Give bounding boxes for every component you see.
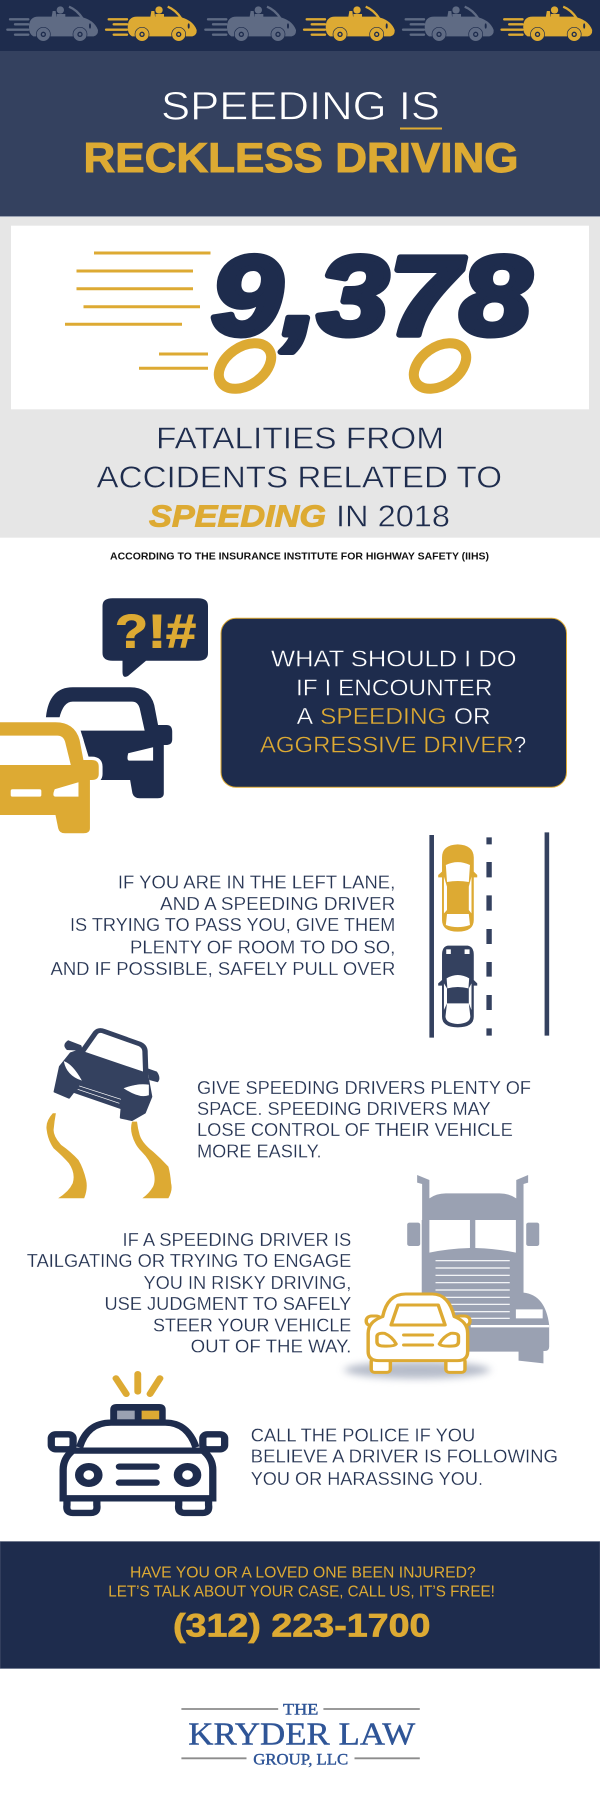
callout line 3: SPEEDING — [320, 703, 447, 729]
cars front view — [0, 687, 172, 833]
text block: tailgating advice: IF A SPEEDING DRIVER IS — [122, 1229, 351, 1250]
text block: call the police — [251, 1425, 558, 1489]
text block: tailgating advice: YOU IN RISKY DRIVING, — [144, 1272, 351, 1293]
icon: truck behind gold car — [344, 1175, 549, 1379]
logo: the kryder law group: THE — [283, 1702, 318, 1719]
callout line 4: AGGRESSIVE DRIVER — [260, 732, 514, 758]
siren rays — [116, 1374, 160, 1394]
text block: left lane advice: IF YOU ARE IN THE LEFT LANE, — [118, 871, 395, 892]
footer line 1: HAVE YOU OR A LOVED ONE BEEN INJURED? — [130, 1564, 476, 1581]
callout line 2: IF I ENCOUNTER — [296, 675, 492, 701]
text: fatalities line 3: IN 2018 — [336, 499, 450, 534]
top band: row of speeding cars — [0, 0, 600, 51]
icon: number wheel right — [405, 334, 475, 398]
car body — [51, 1423, 225, 1513]
navy car — [46, 687, 172, 798]
speech bubble — [102, 598, 208, 677]
text: fatalities line 1: FATALITIES FROM — [156, 421, 444, 456]
shadow — [344, 1361, 490, 1379]
white statistic card — [11, 226, 589, 409]
gold car — [0, 722, 99, 833]
icon: number wheel left — [210, 334, 280, 398]
text block: give space advice: SPACE. SPEEDING DRIVERS MAY — [197, 1098, 491, 1119]
text block: tailgating advice: USE JUDGMENT TO SAFELY — [104, 1293, 351, 1314]
icon: police car — [51, 1374, 225, 1513]
truck — [407, 1175, 549, 1363]
text block: left lane advice: AND IF POSSIBLE, SAFELY PULL OVER — [50, 958, 395, 979]
icon: speeding car gold — [502, 6, 592, 41]
gold car top view — [438, 844, 477, 932]
speed lines — [65, 253, 210, 368]
source note: ACCORDING TO THE INSURANCE INSTITUTE FOR HIGHWAY SAFETY (IIHS) — [110, 551, 489, 562]
icon: speeding car gold — [106, 6, 197, 41]
icon: road with two cars — [429, 832, 549, 1038]
callout: what should I do — [221, 618, 566, 787]
icon: angry speech bubble over two cars — [0, 598, 208, 833]
skidding car — [55, 1031, 159, 1120]
text block: give space advice: GIVE SPEEDING DRIVERS PLENTY OF — [197, 1077, 531, 1098]
light bar — [110, 1404, 166, 1420]
icon: skidding car with tire tracks — [46, 1031, 172, 1198]
tire tracks — [46, 1113, 172, 1198]
text block: tailgating advice: STEER YOUR VEHICLE — [153, 1314, 351, 1335]
panel: fatalities statistic — [0, 217, 600, 538]
text: fatalities line 3: SPEEDING — [149, 499, 326, 534]
callout line 4: ? — [514, 732, 526, 758]
icon: speeding car grey — [7, 6, 98, 41]
panel: title header — [0, 51, 600, 217]
panel: call to action footer — [0, 1542, 600, 1668]
navy car top view — [438, 946, 477, 1027]
gold outline car — [366, 1294, 470, 1372]
text block: left lane advice: PLENTY OF ROOM TO DO SO, — [130, 936, 395, 957]
text block: call the police: CALL THE POLICE IF YOU — [251, 1425, 475, 1446]
underline under IS — [400, 128, 442, 130]
text block: give space advice: LOSE CONTROL OF THEIR VEHICLE — [197, 1119, 513, 1140]
text block: left lane advice — [50, 871, 395, 979]
text block: tailgating advice — [27, 1229, 351, 1357]
title line: reckless driving: RECKLESS DRIVING — [84, 134, 518, 181]
text block: tailgating advice: TAILGATING OR TRYING TO ENGAGE — [27, 1250, 351, 1271]
callout line 3: OR — [454, 703, 491, 729]
callout line 3 — [297, 703, 491, 729]
logo: the kryder law group: GROUP, LLC — [253, 1751, 348, 1768]
logo: the kryder law group — [181, 1702, 420, 1768]
footer line 2: LET’S TALK ABOUT YOUR CASE, CALL US, IT’S FREE! — [108, 1583, 495, 1600]
phone number: (312) 223-1700 — [173, 1608, 430, 1644]
text: fatalities line 2: ACCIDENTS RELATED TO — [96, 460, 502, 495]
logo: the kryder law group: KRYDER LAW — [188, 1715, 416, 1751]
callout line 1: WHAT SHOULD I DO — [271, 646, 517, 672]
text block: tailgating advice: OUT OF THE WAY. — [191, 1336, 351, 1357]
text: fatalities line 3 — [149, 499, 450, 534]
big number: 9,378 — [211, 234, 532, 358]
road lines — [429, 832, 549, 1038]
text block: call the police: BELIEVE A DRIVER IS FOLLOWING — [251, 1446, 558, 1467]
callout line 3: A — [297, 703, 314, 729]
text block: give space advice: MORE EASILY. — [197, 1141, 322, 1162]
text block: give space advice — [197, 1077, 531, 1162]
icon: speeding car grey — [205, 6, 296, 41]
title line: speeding is: SPEEDING IS — [161, 84, 440, 128]
bubble symbols: ?!# — [115, 604, 196, 658]
icon: speeding car grey — [403, 6, 494, 41]
text block: left lane advice: AND A SPEEDING DRIVER — [160, 893, 395, 914]
text block: call the police: YOU OR HARASSING YOU. — [251, 1468, 483, 1489]
text block: left lane advice: IS TRYING TO PASS YOU, GIVE THEM — [70, 914, 395, 935]
icon: speeding car gold — [304, 6, 395, 41]
